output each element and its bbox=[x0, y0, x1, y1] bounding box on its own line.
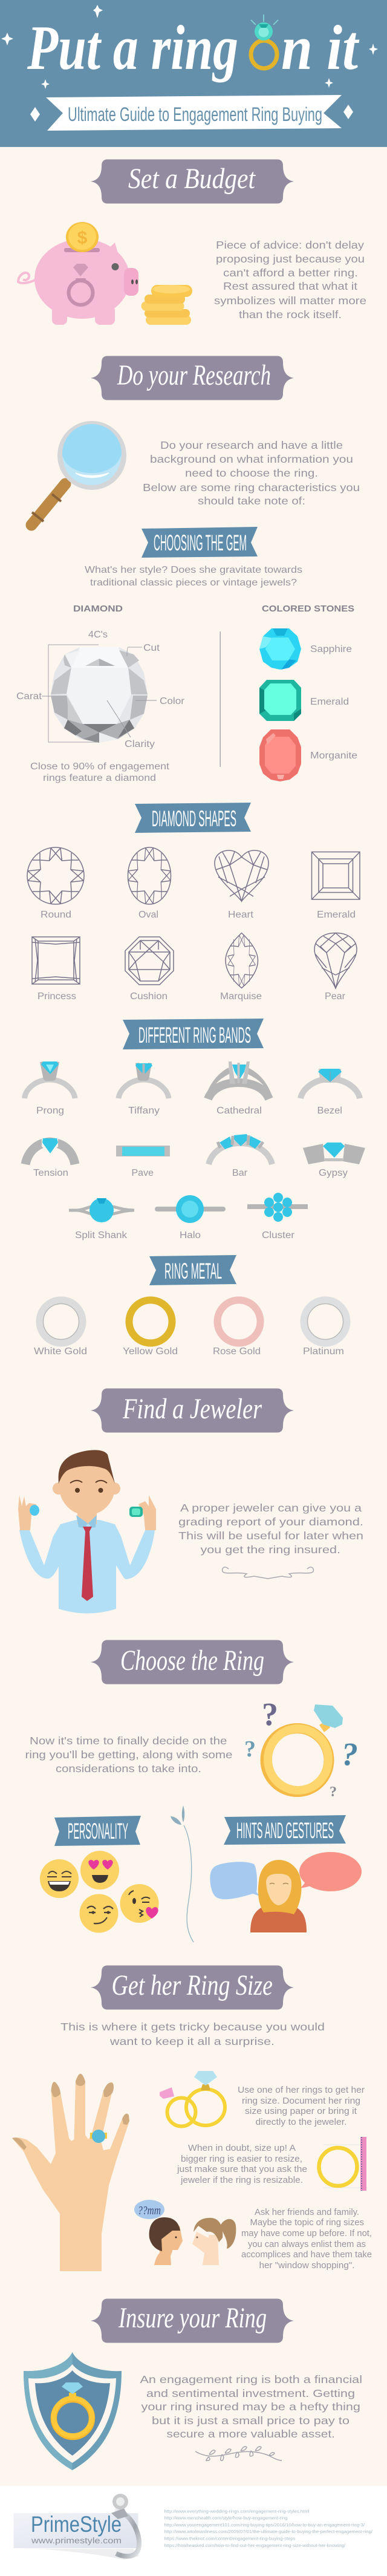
arms and shirt bbox=[19, 1520, 155, 1614]
label: Clarity: Clarity bbox=[125, 739, 155, 749]
text: insurance: secure a more valuable asset. bbox=[167, 2428, 335, 2440]
coin stack bbox=[141, 285, 192, 325]
shape: pear: Pear bbox=[325, 991, 345, 1002]
shape: marquise: Marquise bbox=[220, 991, 262, 1002]
text: budget advice bbox=[214, 239, 366, 321]
label: Cut: Cut bbox=[143, 643, 160, 653]
leafy flourish bbox=[195, 2447, 282, 2460]
ring: bar: Bar bbox=[232, 1168, 247, 1178]
text: ask friends and family: Ask her friends and family. bbox=[255, 2208, 359, 2217]
ring: pave: Pave bbox=[132, 1168, 154, 1178]
hands bbox=[18, 1495, 156, 1530]
blue speech bubble bbox=[210, 1862, 260, 1899]
icon: two rings bbox=[160, 2071, 225, 2127]
text: gem style question bbox=[85, 565, 302, 588]
heading: Choose the Ring bbox=[91, 1640, 294, 1684]
ring on logo bbox=[111, 2494, 139, 2556]
ribbon: Ring Metal bbox=[149, 1255, 236, 1285]
column divider bbox=[220, 631, 221, 767]
ring: split shank: Split Shank bbox=[75, 1230, 127, 1241]
icon: piggy bank with coins bbox=[18, 222, 192, 325]
label: 4C's: 4C's bbox=[88, 630, 108, 640]
title: Put a ring bbox=[27, 12, 238, 83]
text: size up: bigger ring is easier to resize, bbox=[181, 2154, 302, 2164]
ribbon: Ring Metal: RING METAL bbox=[164, 1259, 222, 1283]
metal: yellow gold: Yellow Gold bbox=[123, 1346, 178, 1357]
ring: prong: Prong bbox=[36, 1106, 64, 1116]
text: use one of her rings: Use one of her rings to get her bbox=[238, 2085, 365, 2095]
sources list: http://www.yourengagement101.com/ring-buying-tips/2016/10/how-to-buy-an-engagement-ring-3/ bbox=[164, 2523, 365, 2528]
plant divider bbox=[171, 1805, 194, 1942]
emoji: heart eyes bbox=[80, 1851, 119, 1890]
text: size up: jeweler if the ring is resizable. bbox=[180, 2176, 303, 2185]
logo: PrimeStyle: PrimeStyle bbox=[31, 2512, 122, 2537]
text: budget advice: can't afford a better ring. bbox=[223, 267, 358, 279]
sources list: http://www.menshealth.com/style/how-buy-engagement-ring bbox=[164, 2516, 288, 2521]
held gems bbox=[30, 1505, 39, 1516]
text: insurance: and sentimental investment. Getting bbox=[146, 2387, 355, 2399]
text: ask friends and family: you can always enlist them as bbox=[248, 2240, 366, 2249]
illustration: jeweler holding gems bbox=[18, 1450, 156, 1614]
coin bbox=[66, 222, 99, 252]
thought bubble: ??mm bbox=[138, 2204, 161, 2217]
ring: cluster bbox=[247, 1193, 308, 1241]
text: diamond statistic: Close to 90% of engagement bbox=[30, 761, 170, 772]
icon: gold ring with question marks bbox=[244, 1696, 358, 1800]
shape: emerald bbox=[312, 852, 360, 920]
icon: gold ring with question marks: ? bbox=[262, 1696, 278, 1732]
shape: princess bbox=[32, 937, 80, 1002]
metal: rose gold bbox=[213, 1300, 261, 1357]
sources list: https://www.theknot.com/content/engagement-ring-buying-steps bbox=[164, 2537, 296, 2542]
emoji: laughing bbox=[40, 1859, 79, 1898]
ring: split shank bbox=[69, 1198, 134, 1241]
gem: morganite bbox=[259, 729, 357, 781]
ring: halo: Halo bbox=[180, 1230, 201, 1241]
header panel bbox=[0, 0, 387, 147]
text: research intro: Below are some ring characteristics you bbox=[143, 481, 360, 494]
heading: Set a Budget bbox=[91, 160, 294, 203]
text: insurance: An engagement ring is both a financial bbox=[140, 2373, 362, 2385]
label: Sapphire: Sapphire bbox=[310, 644, 352, 654]
label: Color: Color bbox=[160, 696, 184, 706]
shape: heart: Heart bbox=[228, 910, 254, 920]
emoji: kissing bbox=[120, 1884, 158, 1923]
gem: emerald bbox=[259, 680, 349, 721]
icon: title ring as letter O bbox=[251, 15, 278, 68]
emoji: smirking bbox=[80, 1894, 119, 1933]
ribbon: Choosing the Gem bbox=[141, 527, 258, 558]
ribbon: Hints and Gestures bbox=[224, 1815, 346, 1845]
metal: rose gold: Rose Gold bbox=[213, 1346, 261, 1357]
text: jeweler advice: A proper jeweler can give you a bbox=[180, 1502, 362, 1514]
sources list: http://www.artofmanliness.com/2009/07/01/the-ultimate-guide-to-buying-the-perfect-engagement-ring/ bbox=[164, 2530, 372, 2534]
text: insurance: but it is just a small price to pay to bbox=[152, 2415, 350, 2427]
text: jeweler advice bbox=[178, 1502, 363, 1556]
metal: platinum bbox=[303, 1300, 347, 1357]
sources list: https://howheasked.com/how-to-find-out-her-engagement-ring-size-without-her-knowing/ bbox=[164, 2544, 345, 2548]
ring: gypsy bbox=[303, 1143, 365, 1178]
shape: round: Round bbox=[41, 910, 71, 920]
ribbon: Personality bbox=[54, 1816, 141, 1846]
ring: tension: Tension bbox=[33, 1168, 68, 1178]
metal: white gold: White Gold bbox=[34, 1346, 87, 1357]
text: gem style question: traditional classic pieces or vintage jewels? bbox=[90, 578, 297, 588]
text: size up: just make sure that you ask the bbox=[177, 2165, 307, 2174]
shape: emerald: Emerald bbox=[317, 910, 356, 920]
text: use one of her rings: directly to the jeweler. bbox=[255, 2118, 347, 2127]
ribbon: Different Ring Bands bbox=[123, 1019, 264, 1049]
text: choose the ring intro: considerations to take into. bbox=[56, 1762, 201, 1775]
text: jeweler advice: you get the ring insured. bbox=[201, 1544, 340, 1556]
metal: platinum: Platinum bbox=[303, 1346, 344, 1357]
shape: oval bbox=[128, 847, 171, 920]
text: budget advice: symbolizes will matter more bbox=[214, 295, 366, 307]
ring: cathedral: Cathedral bbox=[216, 1106, 262, 1116]
text: jeweler advice: This will be useful for later when bbox=[178, 1530, 363, 1542]
metal: yellow gold bbox=[123, 1300, 178, 1357]
ring: tiffany bbox=[119, 1063, 169, 1116]
ring: bezel bbox=[301, 1069, 360, 1116]
heading: Do your Research bbox=[91, 356, 294, 400]
text: CHOOSING THE GEM bbox=[154, 530, 247, 555]
text: research intro: background on what information you bbox=[150, 453, 353, 465]
text: size up: When in doubt, size up! A bbox=[188, 2144, 296, 2153]
ring: tiffany: Tiffany bbox=[128, 1106, 160, 1116]
text: ask friends and family bbox=[241, 2208, 372, 2271]
text: choose the ring intro: Now it's time to finally decide on the bbox=[30, 1735, 227, 1747]
illustration: woman with speech bubbles bbox=[210, 1852, 362, 1932]
text: research intro: need to choose the ring. bbox=[185, 467, 318, 479]
label: Emerald: Emerald bbox=[310, 697, 349, 707]
icon: shield with ring bbox=[24, 2352, 122, 2470]
text: use one of her rings bbox=[238, 2085, 365, 2127]
text: research intro: should take note of: bbox=[198, 495, 305, 507]
text: choose the ring intro: ring you'll be getting, along with some bbox=[25, 1749, 232, 1761]
text: insurance bbox=[140, 2373, 362, 2440]
text: jeweler advice: grading report of your diamond. bbox=[178, 1516, 363, 1528]
text: ask friends and family: Maybe the topic of ring sizes bbox=[250, 2218, 364, 2228]
sparkles bbox=[1, 5, 378, 122]
text: ask friends and family: may have come up before. If not, bbox=[241, 2229, 372, 2239]
coin: $ bbox=[77, 228, 88, 248]
ribbon: Diamond Shapes bbox=[135, 803, 251, 833]
text: gem style question: What's her style? Does she gravitate towards bbox=[85, 565, 302, 575]
logo: PrimeStyle: www.primestyle.com bbox=[31, 2536, 122, 2545]
thought bubble bbox=[134, 2200, 164, 2219]
text: ring size intro: want to keep it all a surprise. bbox=[109, 2035, 275, 2047]
label: Carat: Carat bbox=[16, 691, 42, 702]
ring: bezel: Bezel bbox=[317, 1106, 342, 1116]
shape: marquise bbox=[220, 933, 262, 1002]
sources list bbox=[164, 2510, 372, 2548]
heading: Set a Budget: Set a Budget bbox=[128, 163, 256, 195]
text: ask friends and family: accomplices and have them take bbox=[241, 2250, 372, 2260]
shape: pear bbox=[314, 933, 357, 1002]
illustration: hand with ring bbox=[12, 2073, 129, 2271]
heading: Get her Ring Size bbox=[91, 1966, 294, 2009]
metal: white gold bbox=[34, 1300, 87, 1357]
icon: gold ring with question marks: ? bbox=[244, 1736, 256, 1762]
heading: Choose the Ring: Choose the Ring bbox=[120, 1645, 264, 1677]
heading: Find a Jeweler bbox=[91, 1389, 294, 1432]
head bbox=[77, 1506, 97, 1524]
text: budget advice: Rest assured that what it bbox=[223, 280, 357, 292]
icon: gold ring with question marks: ? bbox=[342, 1736, 358, 1772]
header panel: n it bbox=[281, 12, 360, 83]
heading: Colored Stones: COLORED STONES bbox=[262, 604, 354, 614]
shape: princess: Princess bbox=[37, 991, 76, 1002]
ring: halo bbox=[155, 1195, 226, 1241]
text: diamond statistic bbox=[30, 761, 170, 783]
text: budget advice: than the rock itself. bbox=[239, 308, 342, 321]
logo: PrimeStyle bbox=[13, 2494, 139, 2560]
heading: Get her Ring Size: Get her Ring Size bbox=[111, 1969, 273, 2001]
text: use one of her rings: size using paper or bring it bbox=[245, 2107, 357, 2116]
text: insurance: your ring insured may be a hefty thing bbox=[141, 2401, 360, 2413]
icon: magnifying glass bbox=[31, 421, 126, 525]
text: budget advice: Piece of advice: don't delay bbox=[216, 239, 364, 251]
ring: prong bbox=[24, 1061, 75, 1116]
salmon speech bubble bbox=[299, 1852, 362, 1891]
gem: sapphire bbox=[259, 628, 352, 670]
illustration: couple talking bbox=[134, 2200, 236, 2265]
label: Morganite: Morganite bbox=[310, 751, 357, 761]
collar and tie bbox=[76, 1515, 97, 1528]
shape: cushion: Cushion bbox=[130, 991, 167, 1002]
ring: tension bbox=[25, 1138, 75, 1178]
text: ring size intro bbox=[60, 2021, 325, 2047]
text: ask friends and family: her "window shopping". bbox=[259, 2261, 354, 2271]
heading: Insure your Ring: Insure your Ring bbox=[118, 2302, 267, 2334]
subtitle ribbon bbox=[46, 95, 342, 131]
diagram: diamond 4Cs bbox=[16, 630, 184, 749]
text: PERSONALITY bbox=[68, 1819, 128, 1844]
heading: Find a Jeweler: Find a Jeweler bbox=[122, 1393, 262, 1425]
shape: heart bbox=[215, 850, 268, 920]
heading: Insure your Ring bbox=[91, 2298, 294, 2343]
icon: gold ring with question marks: ? bbox=[330, 1784, 337, 1800]
ring: pave bbox=[116, 1146, 170, 1178]
ring: cluster: Cluster bbox=[262, 1230, 294, 1241]
flourish bbox=[223, 1567, 313, 1579]
shape: cushion bbox=[125, 937, 174, 1002]
text: research intro bbox=[143, 439, 360, 507]
text: DIAMOND SHAPES bbox=[152, 806, 236, 831]
ring: bar bbox=[209, 1134, 272, 1178]
text: use one of her rings: ring size. Document her ring bbox=[242, 2096, 360, 2106]
text: choose the ring intro bbox=[25, 1735, 232, 1775]
text: research intro: Do your research and have a little bbox=[160, 439, 343, 451]
shape: round bbox=[27, 847, 84, 920]
icon: ring with ruler bbox=[319, 2137, 366, 2191]
text: budget advice: proposing just because you bbox=[216, 253, 365, 265]
footer panel bbox=[0, 2486, 387, 2576]
sources list: http://www.everything-wedding-rings.com/engagement-ring-styles.html bbox=[164, 2510, 310, 2514]
text: size up bbox=[177, 2144, 307, 2185]
heading: Diamond: DIAMOND bbox=[73, 604, 123, 614]
text: diamond statistic: rings feature a diamond bbox=[43, 773, 156, 783]
heading: Do your Research: Do your Research bbox=[117, 359, 271, 391]
ring: gypsy: Gypsy bbox=[319, 1168, 348, 1178]
text: ring size intro: This is where it gets tricky because you would bbox=[60, 2021, 325, 2033]
shape: oval: Oval bbox=[138, 910, 158, 920]
ring: cathedral bbox=[206, 1061, 272, 1116]
